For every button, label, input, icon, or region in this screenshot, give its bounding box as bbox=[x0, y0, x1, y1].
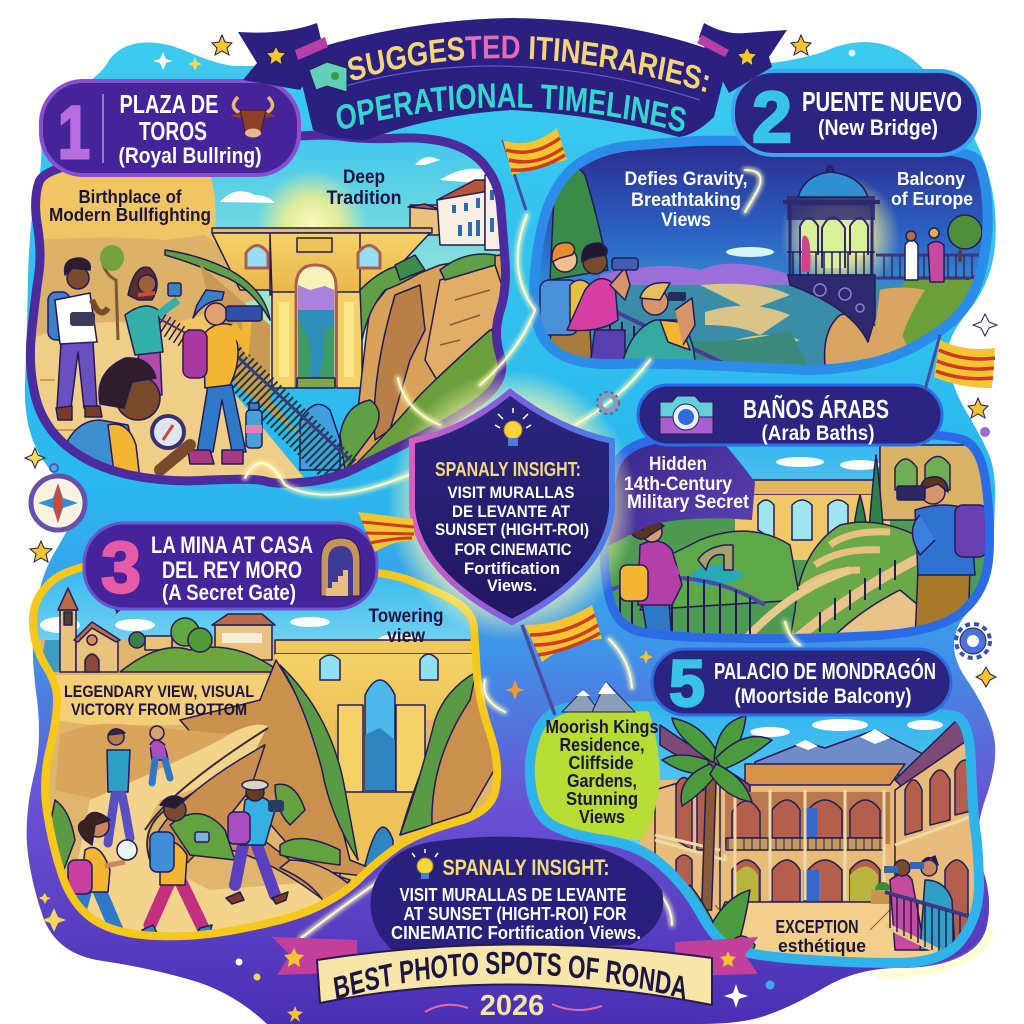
header 1: Plaza de Toros bbox=[41, 81, 299, 175]
icon: bull head bbox=[230, 97, 276, 138]
insight shield: FOR CINEMATIC bbox=[454, 540, 572, 559]
insight shield: SUNSET (HIGHT-ROI) bbox=[435, 520, 589, 539]
title banner: SUGGESTED ITINERARIES: bbox=[348, 36, 709, 92]
icon: light bulb bbox=[495, 408, 531, 446]
panel text: Puente Nuevo captions: Breathtaking bbox=[631, 190, 741, 211]
panel 3: La Mina at Casa del Rey Moro bbox=[30, 555, 510, 964]
footer ribbon: 2026 bbox=[480, 990, 544, 1022]
panel 1: Plaza de Toros bbox=[20, 130, 520, 490]
panel 4: Banos Arabes bbox=[600, 430, 1000, 645]
icon: arched gate bbox=[321, 538, 360, 596]
panel text: Banos Arabes caption: 14th-Century bbox=[624, 474, 732, 495]
insight shield: Fortification bbox=[464, 559, 560, 578]
panel text: Puente Nuevo captions: of Europe bbox=[891, 189, 973, 209]
icon: gear left bbox=[597, 392, 619, 414]
header 1: Plaza de Toros: 1 bbox=[58, 91, 90, 174]
panel text: Plaza de Toros captions: Modern Bullfighting bbox=[49, 205, 211, 225]
bottom insight callout: SPANALY INSIGHT: bbox=[442, 855, 610, 880]
insight shield: VISIT MURALLAS bbox=[448, 483, 574, 502]
title banner: OPERATIONAL TIMELINES bbox=[336, 83, 686, 132]
panel text: La Mina captions bbox=[64, 606, 444, 719]
bottom insight callout: CINEMATIC Fortification Views. bbox=[391, 923, 641, 943]
header 3: La Mina bbox=[84, 523, 377, 618]
panel text: Puente Nuevo captions bbox=[624, 169, 973, 231]
header 5: Palacio de Mondragon: (Moortside Balcony) bbox=[734, 685, 912, 708]
panel text: Palacio captions: esthétique bbox=[778, 936, 866, 956]
panel text: La Mina captions: VICTORY FROM BOTTOM bbox=[71, 700, 247, 719]
mountain peaks behind lime caption bbox=[562, 682, 635, 712]
icon: camera bbox=[660, 396, 713, 434]
panel text: Palacio captions bbox=[546, 717, 866, 956]
panel text: Plaza de Toros captions: Tradition bbox=[326, 188, 402, 209]
header 3: La Mina: LA MINA AT CASA bbox=[151, 532, 313, 559]
insight shield: SPANALY INSIGHT: bbox=[435, 459, 581, 481]
icon: gear right bbox=[956, 624, 990, 658]
panel 2: Puente Nuevo bbox=[530, 140, 995, 395]
panel text: Palacio captions: Residence, bbox=[560, 735, 644, 755]
panel text: Palacio captions: Moorish Kings bbox=[546, 717, 658, 737]
header 4: Banos Arabes bbox=[638, 385, 942, 445]
bottom insight callout bbox=[371, 837, 663, 950]
panel text: Banos Arabes caption bbox=[624, 454, 750, 513]
insight shield bbox=[387, 370, 637, 640]
icon: map bbox=[309, 62, 347, 92]
insight shield: DE LEVANTE AT bbox=[452, 502, 571, 521]
footer ribbon bbox=[272, 937, 758, 1022]
icon: compass bbox=[31, 464, 85, 530]
panel text: Plaza de Toros captions: Birthplace of bbox=[78, 187, 182, 207]
panel text: Banos Arabes caption: Hidden bbox=[649, 454, 707, 475]
header 3: La Mina: 3 bbox=[101, 528, 141, 608]
footer ribbon: BEST PHOTO SPOTS OF RONDA bbox=[334, 952, 686, 1000]
panel 5: Palacio de Mondragon bbox=[520, 700, 990, 970]
panel text: Palacio captions: Stunning bbox=[566, 789, 638, 809]
flags bbox=[358, 128, 995, 715]
panel text: Puente Nuevo captions: Defies Gravity, bbox=[624, 169, 748, 190]
panel text: La Mina captions: view bbox=[387, 626, 425, 647]
panel text: La Mina captions: LEGENDARY VIEW, VISUAL bbox=[64, 682, 254, 701]
panel text: Puente Nuevo captions: Views bbox=[661, 210, 711, 231]
panel text: Palacio captions: Views bbox=[579, 807, 625, 827]
bottom insight callout: AT SUNSET (HIGHT-ROI) FOR bbox=[404, 904, 626, 924]
panel text: Plaza de Toros captions: Deep bbox=[343, 167, 385, 188]
header 1: Plaza de Toros: (Royal Bullring) bbox=[118, 143, 262, 168]
header 2: Puente Nuevo: 2 bbox=[752, 78, 792, 158]
panel text: Banos Arabes caption: Military Secret bbox=[627, 492, 750, 513]
bottom insight callout: VISIT MURALLAS DE LEVANTE bbox=[400, 885, 626, 905]
header 2: Puente Nuevo bbox=[733, 71, 979, 158]
header 1: Plaza de Toros: TOROS bbox=[139, 116, 207, 146]
header 1: Plaza de Toros: PLAZA DE bbox=[120, 89, 218, 119]
glowing swirl lines bbox=[245, 170, 992, 975]
header 3: La Mina: (A Secret Gate) bbox=[162, 580, 296, 605]
panel text: Palacio captions: EXCEPTION bbox=[776, 917, 858, 937]
panel text: Puente Nuevo captions: Balcony bbox=[897, 169, 965, 189]
icon: bulb bbox=[412, 849, 438, 879]
header 4: Banos Arabes: (Arab Baths) bbox=[762, 422, 874, 445]
insight shield: Views. bbox=[487, 576, 537, 595]
header 5: Palacio de Mondragon bbox=[652, 646, 951, 720]
panel text: La Mina captions: Towering bbox=[368, 606, 444, 627]
title banner bbox=[238, 18, 787, 140]
header 5: Palacio de Mondragon: 5 bbox=[669, 646, 705, 720]
panel text: Palacio captions: Gardens, bbox=[567, 771, 637, 791]
header 2: Puente Nuevo: (New Bridge) bbox=[818, 115, 938, 140]
header 3: La Mina: DEL REY MORO bbox=[162, 557, 302, 584]
header 2: Puente Nuevo: PUENTE NUEVO bbox=[802, 86, 962, 117]
panel text: Palacio captions: Cliffside bbox=[568, 753, 634, 773]
header 4: Banos Arabes: BAÑOS ÁRABS bbox=[743, 394, 889, 424]
header 5: Palacio de Mondragon: PALACIO DE MONDRAGÓN bbox=[714, 657, 936, 684]
panel text: Plaza de Toros captions bbox=[49, 167, 402, 225]
